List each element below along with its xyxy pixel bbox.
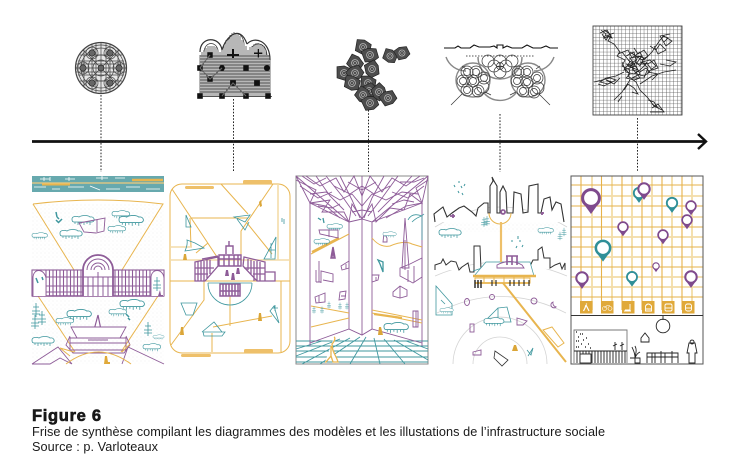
figure title: Figure 6 bbox=[32, 407, 101, 425]
figure description: Frise de synthèse compilant les diagrammes des modèles et les illustations de l’infrastructure sociale bbox=[32, 425, 605, 439]
model diagram 2: grid with arches and nodes bbox=[197, 32, 272, 99]
orange buses bbox=[181, 180, 273, 357]
teal elements bbox=[181, 215, 284, 336]
orange small figure bbox=[378, 327, 383, 335]
purple glyphs bbox=[450, 210, 556, 355]
location pins bbox=[576, 183, 697, 289]
transport icons bbox=[580, 301, 694, 314]
teal glyphs bbox=[436, 181, 566, 356]
civic bridge structure bbox=[473, 256, 536, 288]
orange wall lines bbox=[311, 234, 422, 362]
purple figures bbox=[225, 268, 240, 280]
textured top band bbox=[32, 176, 164, 192]
pathways bbox=[170, 184, 290, 352]
stipple ground bbox=[32, 204, 164, 364]
fan outline bbox=[33, 200, 163, 352]
teal floor grid bbox=[296, 337, 428, 364]
concentric arcs bbox=[435, 207, 567, 364]
zigzag ceiling bbox=[296, 176, 428, 222]
orange spine and semicircle bbox=[489, 213, 566, 362]
model diagram 5: square grid with network bbox=[593, 26, 682, 115]
box on fan bbox=[79, 218, 105, 233]
caption bbox=[32, 407, 605, 454]
source: Source : p. Varloteaux bbox=[32, 440, 159, 454]
greenhouse bbox=[32, 255, 164, 296]
dotted connectors bbox=[101, 95, 638, 172]
model diagram 1: circular mandala bbox=[76, 42, 126, 94]
foliage bbox=[576, 332, 592, 348]
panel 2: central square illustration bbox=[170, 180, 290, 357]
central buildings bbox=[195, 241, 275, 296]
panel 3: interior perspective illustration bbox=[296, 176, 428, 364]
street section bbox=[574, 316, 697, 363]
trees bbox=[31, 212, 161, 336]
panel 1: greenhouse illustration bbox=[31, 176, 164, 364]
middle skyline and bridge bbox=[435, 246, 565, 272]
panel 4: skyline and concentric arcs illustration bbox=[434, 177, 567, 366]
clouds bbox=[32, 211, 164, 351]
purple volumes bbox=[315, 218, 422, 327]
model diagram 3: scattered blobs bbox=[335, 38, 411, 112]
timeline arrow bbox=[32, 134, 706, 149]
model diagram 4: skyline and overlapping circles bbox=[444, 45, 558, 105]
teal clouds and trees bbox=[312, 214, 424, 333]
orange grid bbox=[571, 176, 703, 310]
pavilion bbox=[32, 315, 164, 364]
upper skyline bbox=[434, 177, 564, 222]
orange figure bbox=[104, 356, 110, 364]
panel 5: map grid with pins and street section bbox=[571, 176, 703, 364]
walls and column bbox=[296, 176, 428, 346]
orange figures bbox=[180, 200, 262, 335]
